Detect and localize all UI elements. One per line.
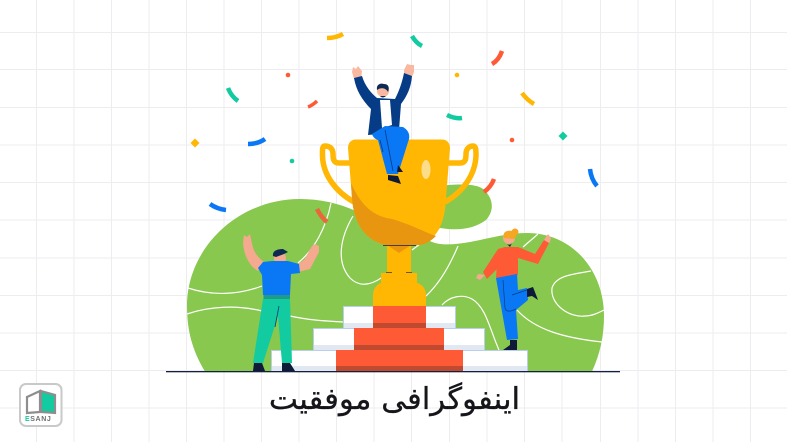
logo: ESANJ xyxy=(20,384,62,426)
white steps xyxy=(272,306,528,372)
ground line xyxy=(166,371,620,372)
person: woman on the right xyxy=(476,228,551,350)
white contour lines xyxy=(187,203,604,350)
icon: open book xyxy=(27,391,55,413)
trophy highlight xyxy=(422,160,430,179)
trophy xyxy=(322,140,476,307)
podium xyxy=(272,306,528,372)
trophy stem xyxy=(387,245,411,274)
trophy base xyxy=(373,273,426,307)
green background blob xyxy=(187,185,604,372)
trophy bowl xyxy=(348,140,450,245)
trophy handles xyxy=(322,146,476,202)
logo: ESANJ: ESANJ xyxy=(25,416,51,423)
confetti xyxy=(190,34,597,222)
red carpet xyxy=(373,306,426,328)
person: man on the left xyxy=(243,234,319,371)
title: اینفوگرافی موفقیت xyxy=(269,381,520,417)
person: man sitting on trophy xyxy=(352,64,414,184)
